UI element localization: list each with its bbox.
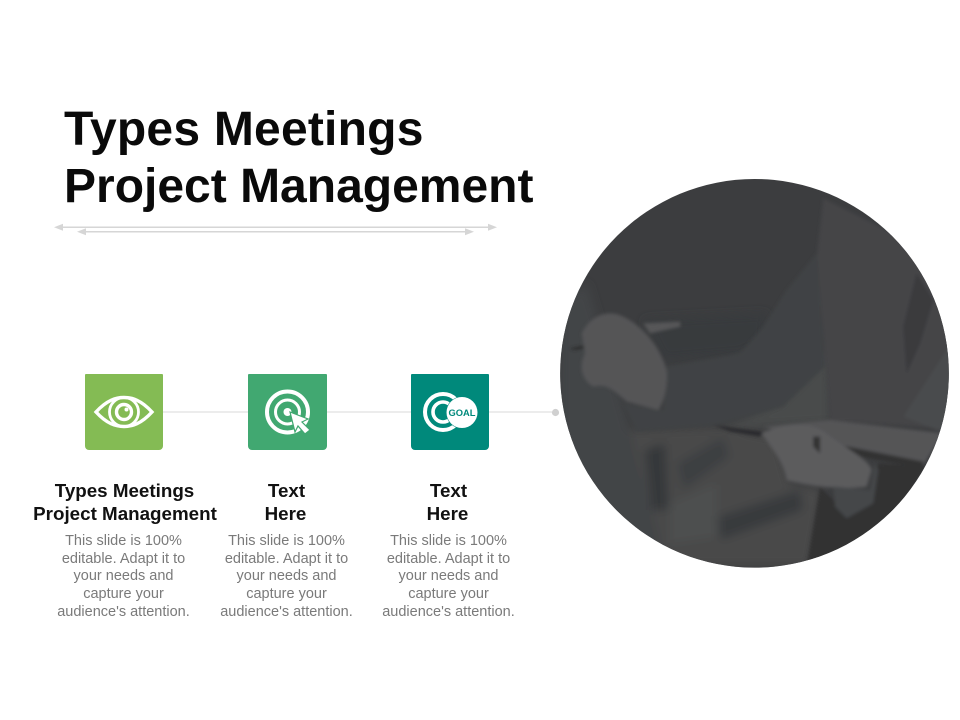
column 1 body text: your needs and [74,568,173,584]
sleeve [623,253,825,432]
column 3 heading: Here [427,503,468,524]
column 3 body text: your needs and [399,568,498,584]
title: Project Management [64,160,533,213]
column 1 body text [57,533,190,620]
column 2 heading: Text [268,480,305,501]
icon tile: target with cursor [248,374,327,450]
pen [643,322,681,333]
icon tile: goal: GOAL [448,408,476,419]
column 1 heading: Types Meetings [55,480,194,501]
column 2 heading [265,480,306,524]
column 3 body text: audience's attention. [382,604,515,620]
column 1 heading [33,480,217,524]
icon tile: goal [411,374,489,450]
connector line with end dot [163,409,559,416]
column 1 body text: capture your [83,586,164,602]
column 1 heading: Project Management [33,503,217,524]
column 2 body text: your needs and [237,568,336,584]
double arrow divider [54,224,497,236]
column 2 body text: audience's attention. [220,604,353,620]
icon tile: eye [85,374,163,450]
left hand [582,313,667,410]
column 1 body text: editable. Adapt it to [62,551,185,567]
right hand [762,425,872,488]
column 3 body text: capture your [408,586,489,602]
column 2 heading: Here [265,503,306,524]
folder [763,420,943,465]
column 3 body text: editable. Adapt it to [387,551,510,567]
lower suit [807,463,925,567]
column 3 heading [427,480,468,524]
photo circle: businessmen with dark overlay [560,179,949,568]
column 2 body text: This slide is 100% [228,533,345,549]
torso [818,202,948,426]
column 2 body text [220,533,353,620]
column 2 body text: editable. Adapt it to [225,551,348,567]
column 1 body text: audience's attention. [57,604,190,620]
title: Types Meetings [64,103,424,156]
title [64,103,533,213]
column 1 body text: This slide is 100% [65,533,182,549]
column 3 heading: Text [430,480,467,501]
column 3 body text: This slide is 100% [390,533,507,549]
column 2 body text: capture your [246,586,327,602]
column 3 body text [382,533,515,620]
